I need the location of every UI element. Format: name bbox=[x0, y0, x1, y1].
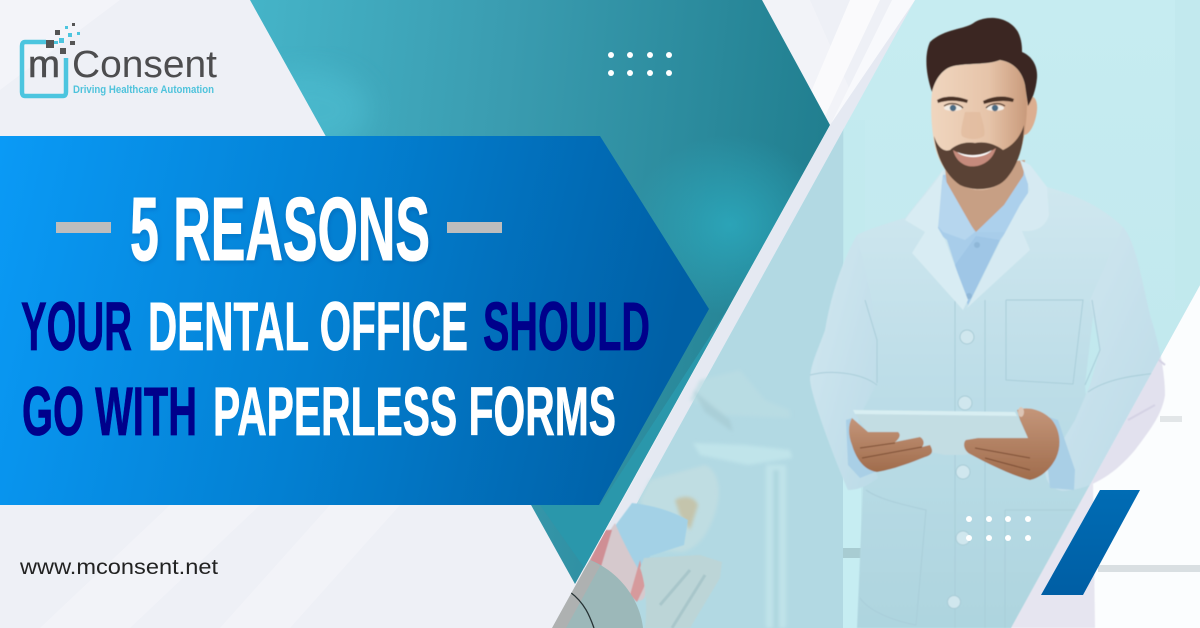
panel: teal chevron bbox=[250, 0, 830, 590]
nose bbox=[961, 112, 985, 139]
icon: tablet frame bbox=[22, 42, 66, 96]
ear bbox=[1024, 96, 1037, 135]
buttons bbox=[948, 330, 974, 608]
title line 2: SHOULD bbox=[483, 288, 650, 365]
eyes bbox=[944, 104, 1005, 111]
photo: dental chair and patient bbox=[552, 370, 792, 628]
shirt cuffs bbox=[846, 415, 1075, 490]
logo: mConsent bbox=[22, 23, 217, 96]
title line 2: DENTAL OFFICE bbox=[148, 288, 468, 365]
shirt collar bbox=[937, 176, 975, 240]
divider bar right bbox=[447, 222, 502, 233]
mouth bbox=[953, 148, 996, 166]
accent: blue slash bbox=[1041, 490, 1140, 595]
person bbox=[810, 18, 1170, 628]
dot grid: top bbox=[608, 52, 672, 76]
instrument tray and pole bbox=[690, 370, 792, 628]
hair bbox=[926, 18, 1037, 106]
title line 2: YOUR bbox=[21, 288, 132, 365]
title line 3 bbox=[22, 373, 616, 450]
eyebrows bbox=[937, 97, 1014, 104]
footrest bbox=[640, 555, 722, 628]
logo letter m: m bbox=[28, 44, 60, 86]
left sleeve bbox=[810, 244, 862, 490]
right sleeve bbox=[1046, 263, 1161, 491]
logo wordmark: Consent bbox=[72, 44, 217, 86]
coat lapels bbox=[905, 170, 968, 310]
sock bbox=[590, 523, 646, 600]
coat seams and pockets bbox=[810, 299, 1151, 476]
title line 3: PAPERLESS FORMS bbox=[213, 373, 616, 450]
shoe bbox=[640, 465, 719, 552]
dot grid: bottom bbox=[966, 516, 1031, 541]
title: 5 reasons bbox=[56, 180, 502, 280]
chair seat bbox=[552, 560, 643, 628]
right hand bbox=[964, 407, 1059, 480]
icon: pixel squares bbox=[46, 23, 80, 54]
photo: dental office background bbox=[552, 0, 1200, 628]
heading text: 5 REASONS bbox=[130, 180, 430, 280]
lab coat bbox=[810, 160, 1170, 628]
tablet bbox=[853, 410, 1028, 455]
panel: blue title banner bbox=[0, 136, 709, 505]
face bbox=[931, 60, 1027, 190]
logo tagline: Driving Healthcare Automation bbox=[73, 84, 214, 96]
jeans bbox=[616, 502, 688, 567]
title line 3: GO WITH bbox=[22, 373, 197, 450]
beard bbox=[934, 125, 1024, 189]
shirt bbox=[935, 165, 1028, 305]
left hand bbox=[849, 418, 932, 472]
website url: www.mconsent.net bbox=[19, 556, 218, 579]
divider bar left bbox=[56, 222, 111, 233]
neck bbox=[945, 160, 1025, 232]
lab coat overflow past diagonal bbox=[1011, 357, 1166, 628]
